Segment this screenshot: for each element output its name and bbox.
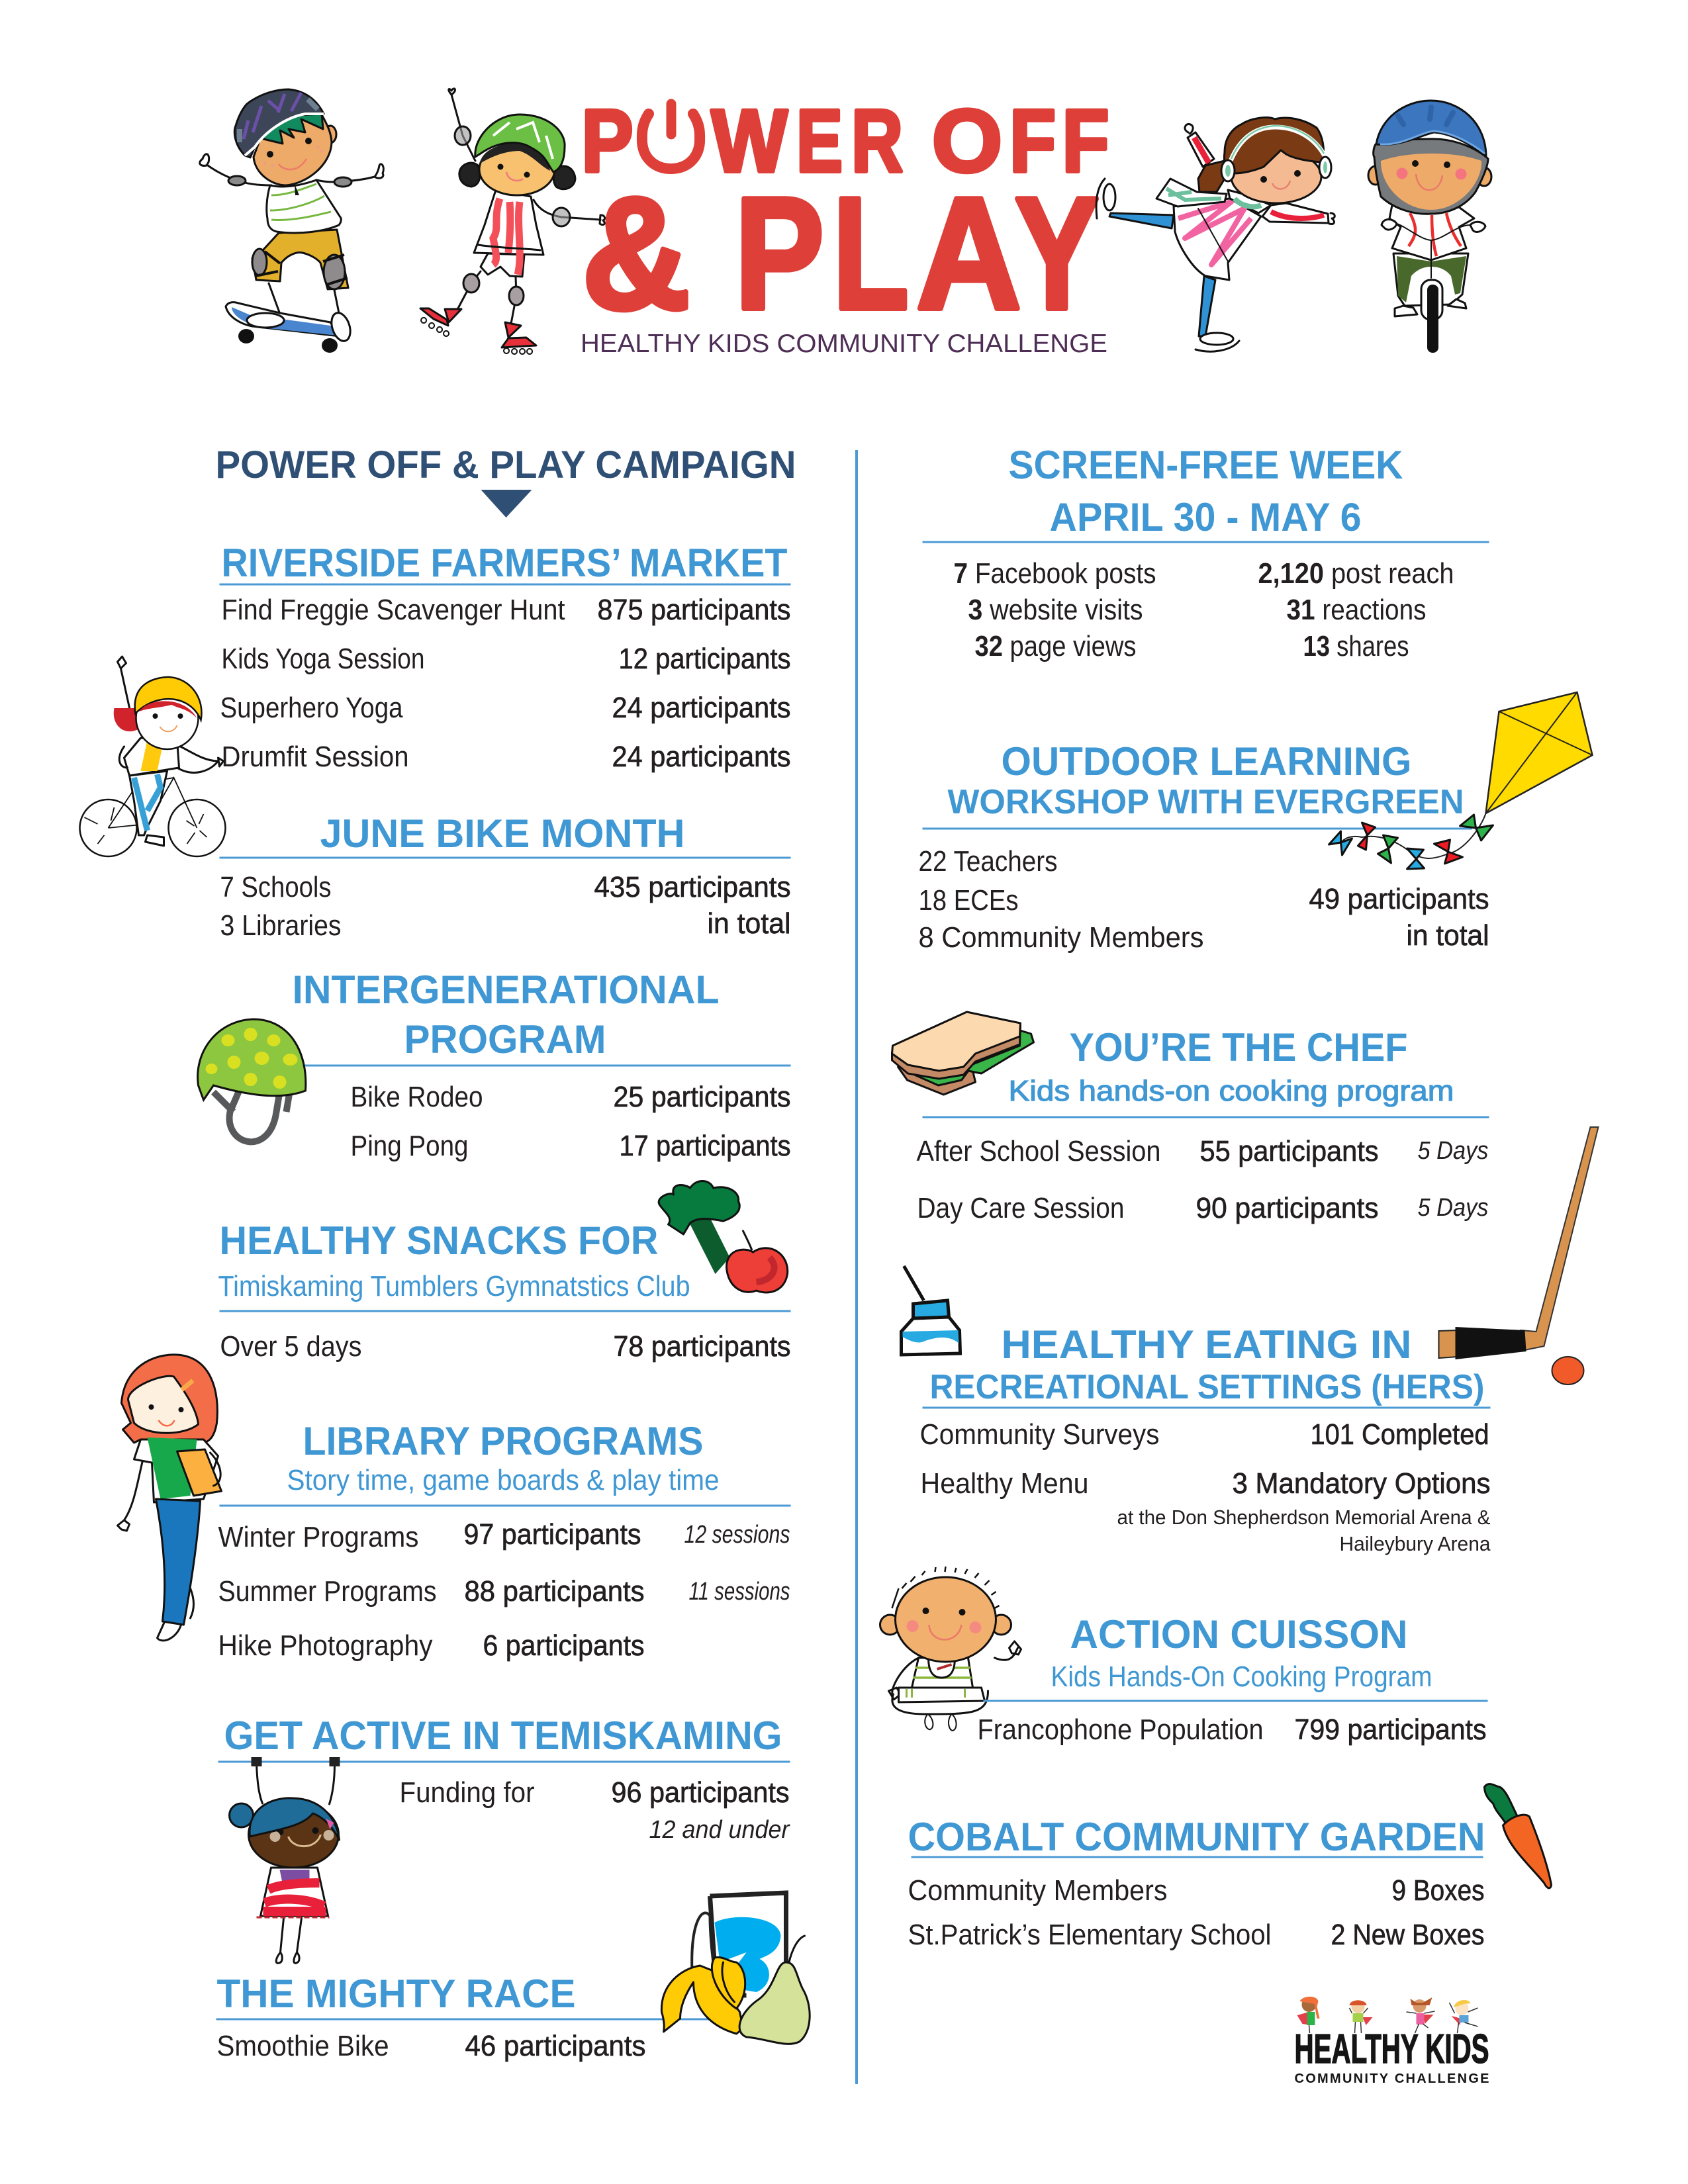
left stats [953, 557, 1156, 662]
icon: carrot [1484, 1784, 1552, 1888]
panel: healthy eating in recreational settings: Healthy Menu [920, 1467, 1088, 1500]
panel: library programs: Hike Photography [218, 1629, 433, 1662]
title: power off: R [851, 92, 903, 191]
panel: outdoor learning: in total [1406, 919, 1489, 952]
heading: OUTDOOR LEARNING [1001, 739, 1411, 784]
panel: riverside farmers market: 12 participants [618, 643, 790, 675]
panel: june bike month: in total [707, 907, 790, 940]
icon: sandwich [892, 1012, 1034, 1095]
heading: YOU’RE THE CHEF [1070, 1025, 1407, 1069]
panel: june bike month: 3 Libraries [220, 909, 342, 942]
panel: library programs [218, 1419, 790, 1662]
heading: HEALTHY SNACKS FOR [220, 1218, 658, 1263]
heading: JUNE BIKE MONTH [320, 811, 684, 856]
panel: intergenerational program: 17 participants [620, 1130, 790, 1162]
heading: THE MIGHTY RACE [217, 1972, 576, 2016]
panel: you're the chef: After School Session [916, 1135, 1161, 1167]
panel: get active in temiskaming: 96 participants [612, 1776, 789, 1809]
icon: ice skater kid [1096, 118, 1335, 351]
title: power off: F [1009, 92, 1056, 191]
panel: healthy eating in recreational settings: Community Surveys [920, 1418, 1160, 1451]
right stats: 13 shares [1303, 630, 1409, 662]
panel: library programs: 11 sessions [688, 1578, 790, 1606]
panel: library programs: 6 participants [483, 1629, 645, 1662]
panel: healthy eating in recreational settings [920, 1322, 1491, 1555]
icon: green helmet [198, 1019, 306, 1142]
panel: healthy snacks: Timiskaming Tumblers Gymnatstics Club [218, 1270, 690, 1302]
panel: screen-free week: APRIL 30 - MAY 6 [1050, 495, 1361, 539]
heading: COBALT COMMUNITY GARDEN [908, 1815, 1485, 1859]
panel: action cuisson: Kids Hands-On Cooking Program [1051, 1661, 1432, 1693]
left stats: 32 page views [974, 630, 1136, 662]
subtitle: HEALTHY KIDS COMMUNITY CHALLENGE [581, 330, 1107, 358]
heading: HEALTHY EATING IN [1001, 1322, 1411, 1367]
icon: bike kid with blue helmet [1368, 101, 1491, 353]
logo: healthy kids community challenge: COMMUNITY CHALLENGE [1295, 2071, 1489, 2086]
panel: library programs: Summer Programs [218, 1575, 437, 1608]
panel: healthy snacks: Over 5 days [220, 1330, 361, 1363]
panel: outdoor learning [919, 739, 1489, 954]
title: power off: E [796, 92, 843, 191]
icon: red-haired girl with book [118, 1355, 221, 1641]
icon: milk carton [902, 1266, 960, 1355]
left stats: 7 Facebook posts [953, 557, 1156, 590]
title: and play: A [916, 165, 1021, 343]
heading: campaign [216, 443, 796, 518]
panel: intergenerational program [293, 968, 790, 1162]
panel: you're the chef: 90 participants [1196, 1192, 1378, 1224]
panel: action cuisson: 799 participants [1295, 1713, 1487, 1746]
panel: you're the chef: 55 participants [1199, 1135, 1378, 1167]
title: power off: O [932, 92, 1002, 191]
heading: campaign: POWER OFF & PLAY CAMPAIGN [216, 443, 796, 486]
panel: the mighty race: 46 participants [465, 2030, 646, 2062]
logo: healthy kids community challenge: HEALTHY KIDS [1295, 2026, 1489, 2072]
heading: GET ACTIVE IN TEMISKAMING [224, 1713, 782, 1758]
icon: seated boy [880, 1567, 1021, 1731]
heading: INTERGENERATIONAL [293, 968, 719, 1012]
panel: the mighty race [216, 1972, 710, 2062]
title: and play: Y [1015, 165, 1099, 343]
panel: cobalt community garden: Community Members [908, 1874, 1168, 1907]
panel: riverside farmers market: 24 participants [612, 692, 790, 724]
title: and play: L [833, 165, 909, 343]
panel: you're the chef: 5 Days [1418, 1137, 1488, 1165]
arrow: down triangle [481, 490, 532, 518]
right stats: 2,120 post reach [1258, 557, 1454, 590]
panel: healthy eating in recreational settings: 101 Completed [1311, 1418, 1489, 1451]
panel: riverside farmers market: 24 participants [612, 741, 790, 773]
panel: healthy snacks: 78 participants [613, 1330, 790, 1363]
panel: library programs: 12 sessions [684, 1521, 790, 1549]
panel: action cuisson [977, 1612, 1488, 1746]
panel: outdoor learning: 8 Community Members [919, 921, 1203, 954]
title: and play: P [735, 165, 824, 343]
panel: cobalt community garden: 2 New Boxes [1331, 1919, 1484, 1951]
heading: RIVERSIDE FARMERS’ MARKET [221, 541, 788, 585]
icon: hockey stick and ball [1439, 1127, 1598, 1385]
header title [581, 92, 1109, 358]
panel: you're the chef: Day Care Session [917, 1192, 1124, 1224]
panel: library programs: 97 participants [463, 1518, 641, 1551]
logo: healthy kids community challenge [1295, 1997, 1489, 2086]
title: power off [581, 92, 1109, 191]
panel: get active in temiskaming: Funding for [400, 1776, 535, 1809]
panel: library programs: 88 participants [465, 1575, 645, 1608]
panel: june bike month: 7 Schools [220, 871, 331, 903]
title: power off: P [581, 92, 633, 191]
icon: vegetable and apple [659, 1181, 788, 1293]
content: body of infographic [79, 443, 1598, 2086]
panel: cobalt community garden: 9 Boxes [1391, 1874, 1484, 1907]
icon: smoothie glass and fruit [661, 1893, 810, 2044]
panel: cobalt community garden [908, 1815, 1485, 1951]
left stats: 3 website visits [968, 594, 1143, 626]
icon: skateboard kid [200, 89, 383, 353]
panel: library programs: Story time, game boards & play time [287, 1464, 719, 1496]
panel: healthy eating in recreational settings: at the Don Shepherdson Memorial Arena & [1117, 1506, 1491, 1529]
icon: power symbol [642, 104, 700, 169]
panel: june bike month: 435 participants [594, 871, 790, 903]
panel: intergenerational program: Ping Pong [351, 1130, 469, 1162]
panel: riverside farmers market: Drumfit Session [221, 741, 409, 773]
panel: riverside farmers market: Superhero Yoga [220, 692, 403, 724]
heading: LIBRARY PROGRAMS [303, 1419, 703, 1463]
panel: healthy eating in recreational settings: RECREATIONAL SETTINGS (HERS) [929, 1368, 1484, 1406]
panel: get active in temiskaming: 12 and under [649, 1816, 790, 1844]
panel: healthy snacks [218, 1218, 790, 1363]
panel: outdoor learning: 49 participants [1309, 883, 1489, 915]
panel: june bike month [220, 811, 790, 942]
icon: roller skate kid [420, 89, 605, 354]
icon: girl hanging from line [229, 1757, 340, 1963]
panel: healthy eating in recreational settings: 3 Mandatory Options [1233, 1467, 1491, 1500]
panel: cobalt community garden: St.Patrick’s Elementary School [908, 1919, 1271, 1951]
logo kids [1297, 1997, 1477, 2033]
heading: ACTION CUISSON [1070, 1612, 1407, 1657]
title: power off: F [1062, 92, 1109, 191]
panel: the mighty race: Smoothie Bike [217, 2030, 389, 2062]
panel: intergenerational program: Bike Rodeo [351, 1081, 483, 1113]
panel: outdoor learning: 22 Teachers [919, 845, 1058, 878]
right stats: 31 reactions [1287, 594, 1426, 626]
panel: screen-free week [923, 443, 1489, 662]
panel: you're the chef: 5 Days [1418, 1194, 1488, 1222]
divider [855, 450, 858, 2084]
panel: riverside farmers market: 875 participants [597, 594, 790, 626]
panel: you're the chef [916, 1025, 1489, 1224]
icon: kite [1329, 692, 1593, 869]
panel: you're the chef: Kids hands-on cooking program [1009, 1075, 1454, 1107]
panel: get active in temiskaming [218, 1713, 790, 1844]
panel: intergenerational program: PROGRAM [404, 1017, 606, 1062]
panel: library programs: Winter Programs [218, 1521, 418, 1553]
panel: intergenerational program: 25 participants [613, 1081, 790, 1113]
panel: outdoor learning: WORKSHOP WITH EVERGREEN [948, 783, 1464, 821]
heading: SCREEN-FREE WEEK [1009, 443, 1403, 487]
panel: healthy eating in recreational settings: Haileybury Arena [1340, 1532, 1491, 1555]
title: and play: & [582, 165, 690, 343]
panel: riverside farmers market: Find Freggie Scavenger Hunt [221, 594, 565, 626]
panel: riverside farmers market: Kids Yoga Session [221, 643, 425, 675]
panel: riverside farmers market [220, 541, 790, 773]
right stats [1258, 557, 1454, 662]
panel: outdoor learning: 18 ECEs [919, 884, 1018, 917]
icon: kid on bicycle [79, 657, 225, 856]
title: power off: W [711, 92, 788, 191]
panel: action cuisson: Francophone Population [977, 1713, 1263, 1746]
